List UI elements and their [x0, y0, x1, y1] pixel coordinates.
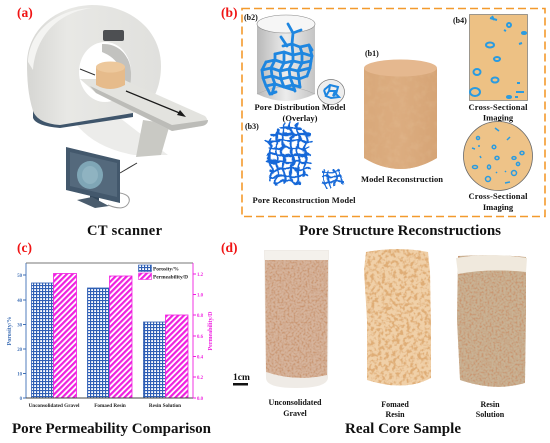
right axis ticks: 0.6	[197, 335, 204, 340]
icon: overlay inset	[318, 80, 344, 104]
icon: transparent cylinder	[257, 15, 315, 101]
dashed border	[242, 8, 545, 216]
right axis ticks: 1.0	[197, 294, 204, 298]
category labels: Resin Solution	[149, 403, 181, 409]
icon: sliding table	[80, 69, 208, 157]
icon: scanner gantry	[27, 5, 161, 128]
left axis ticks: 10	[17, 372, 23, 378]
(b4) cross-sectional imaging	[453, 14, 532, 212]
caption: overlay: (Overlay)	[283, 113, 318, 123]
caption: fomaed: Fomaed	[381, 400, 409, 409]
heading: real core sample: Real Core Sample	[345, 421, 461, 437]
right axis ticks: 0.4	[197, 356, 204, 360]
icon: floor shadow	[76, 118, 168, 155]
icon: core sample	[96, 62, 125, 89]
(b3) pore reconstruction model	[245, 122, 356, 205]
caption: resin upper: Resin	[480, 400, 500, 409]
caption: model reconstruction: Model Reconstruction	[361, 174, 443, 184]
left axis title: Porosity/%	[7, 317, 13, 345]
caption: CT scanner: CT scanner	[87, 223, 163, 239]
photo: foamed resin	[364, 249, 431, 386]
panel: (d) real core sample	[221, 240, 527, 437]
caption: pore distribution model: Pore Distribution Model	[254, 102, 346, 112]
caption: resin: Resin	[385, 410, 405, 419]
right axis ticks: 0.8	[197, 314, 204, 319]
caption: gravel: Gravel	[283, 409, 308, 418]
left axis ticks: 0	[20, 397, 23, 402]
icon: large pore network	[266, 122, 310, 184]
axes	[23, 263, 196, 398]
label: (a): (a)	[17, 5, 33, 20]
bars: porosity	[32, 283, 166, 398]
panel: (c) pore permeability comparison	[7, 240, 214, 437]
left axis ticks: 20	[17, 348, 23, 353]
label: (d): (d)	[221, 240, 238, 255]
caption: pore reconstruction model: Pore Reconstruction Model	[252, 195, 356, 205]
right axis ticks: 0.2	[197, 376, 204, 381]
legend: Porosity/%	[153, 266, 179, 272]
icon: reconstructed core	[364, 60, 437, 169]
label: (b4): (b4)	[453, 16, 467, 25]
caption: solution: Solution	[476, 410, 505, 419]
right axis ticks: 1.2	[197, 273, 204, 278]
label: (b1): (b1)	[365, 49, 379, 58]
bars: permeability	[54, 274, 188, 398]
caption: unconsolidated gravel: Unconsolidated	[269, 398, 322, 407]
left axis ticks: 50	[17, 274, 23, 279]
icon: pore network	[262, 24, 312, 94]
caption: imaging lower: Imaging	[483, 202, 514, 212]
caption: imaging: Imaging	[483, 112, 514, 122]
right axis ticks	[197, 273, 204, 402]
legend	[138, 265, 188, 280]
image: circular section	[464, 122, 532, 190]
scale bar: 1cm	[233, 373, 250, 383]
right axis ticks: 0.0	[197, 397, 204, 402]
(b2) pore distribution model	[244, 13, 346, 123]
left axis ticks: 30	[17, 324, 23, 328]
legend: Permeability/D	[153, 274, 188, 280]
right axis title: Permeability/D	[208, 311, 214, 350]
category labels: Fomaed Resin	[94, 403, 126, 409]
left axis ticks	[17, 274, 23, 402]
(b1) model reconstruction	[361, 49, 443, 184]
heading: pore structure reconstructions: Pore Structure Reconstructions	[299, 223, 501, 239]
left axis ticks: 40	[17, 299, 23, 304]
icon: small pore network	[322, 168, 342, 187]
photo: resin solution	[456, 255, 527, 387]
panel: (a) CT scanner	[17, 5, 208, 239]
label: (b): (b)	[221, 5, 238, 20]
category labels	[29, 403, 181, 409]
bar chart	[7, 263, 214, 409]
caption: cross-sectional imaging lower: Cross-Sectional	[468, 191, 528, 201]
category labels: Unconsolidated Gravel	[29, 403, 80, 409]
photo: unconsolidated gravel	[264, 250, 329, 388]
label: (b2): (b2)	[244, 13, 258, 22]
arrow: table travel	[126, 91, 186, 117]
heading: pore permeability comparison: Pore Permeability Comparison	[12, 421, 212, 437]
label: (c): (c)	[17, 240, 32, 255]
icon: monitor	[66, 147, 137, 208]
panel: (b) pore structure reconstructions	[221, 5, 545, 239]
label: (b3): (b3)	[245, 122, 259, 131]
caption: cross-sectional imaging: Cross-Sectional	[468, 102, 528, 112]
image: rectangular section	[470, 14, 528, 100]
